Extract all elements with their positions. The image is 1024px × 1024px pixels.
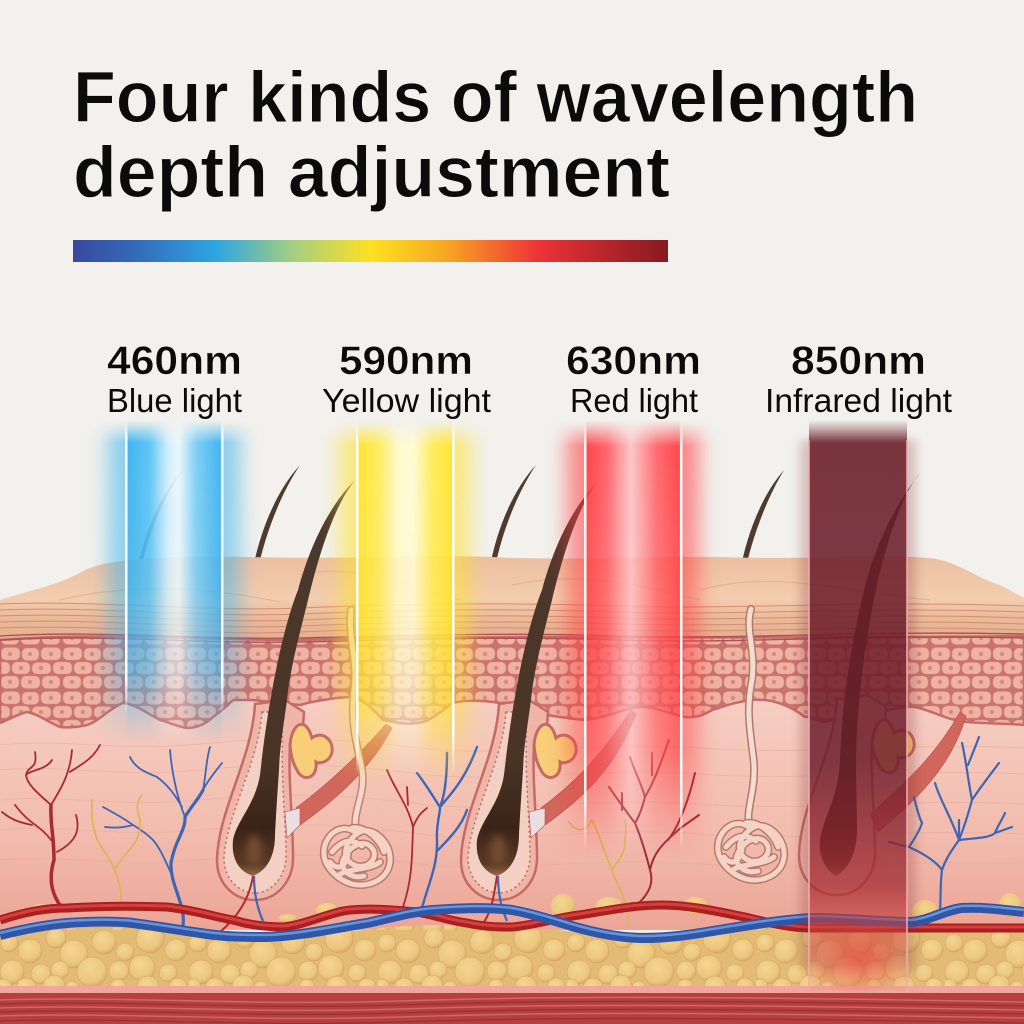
blue vein [0, 906, 1024, 938]
muscle layer [0, 993, 1024, 1024]
stratified skin layers [0, 603, 1024, 633]
beam: red light 630nm [567, 420, 699, 860]
label: 850nm infrared light: 850nm [791, 339, 926, 383]
hair follicle 1 [217, 480, 355, 932]
arrector pili muscles [285, 710, 966, 838]
beam: yellow light 590nm [340, 420, 470, 785]
red capillary trees [2, 740, 699, 908]
beam: infrared light 850nm [800, 420, 916, 996]
label: 460nm blue light: 460nm [107, 339, 242, 383]
hair follicle 3 [799, 473, 920, 895]
yellow nerves [92, 795, 628, 928]
label: 590nm yellow light [322, 339, 491, 419]
epidermis band with cells [0, 636, 1024, 728]
basement line strokes [0, 633, 1024, 642]
short hairs above the skin [135, 465, 784, 578]
red artery [0, 904, 1024, 928]
spectrum gradient bar [73, 240, 668, 262]
hair follicle 2 [461, 480, 599, 922]
blue capillary trees [103, 737, 1012, 925]
label: 460nm blue light: Blue light [107, 382, 242, 419]
subcutaneous fat band [0, 924, 1024, 990]
title: Four kinds of wavelength [73, 58, 918, 138]
label: 630nm red light: 630nm [566, 339, 701, 383]
sweat gland 2 [718, 609, 784, 880]
stratum corneum [0, 556, 1024, 650]
label: 460nm blue light [107, 339, 242, 419]
title: depth adjustment [73, 133, 670, 213]
pink fascia band [0, 986, 1024, 995]
fat lobes above vessels [30, 893, 1021, 924]
dermis layer [0, 690, 1024, 930]
label: 850nm infrared light: Infrared light [765, 382, 952, 419]
sweat gland 1 [324, 610, 390, 885]
label: 590nm yellow light: Yellow light [322, 382, 491, 419]
skin cross-section diagram [0, 465, 1024, 1024]
dermis wavy fibres [0, 739, 1024, 867]
label: 590nm yellow light: 590nm [339, 339, 473, 383]
label: 630nm red light: Red light [570, 382, 698, 419]
label: 850nm infrared light [765, 339, 952, 419]
label: 630nm red light [566, 339, 701, 419]
beam: blue light 460nm [108, 420, 240, 745]
surface shading [60, 571, 930, 602]
title [73, 58, 918, 213]
